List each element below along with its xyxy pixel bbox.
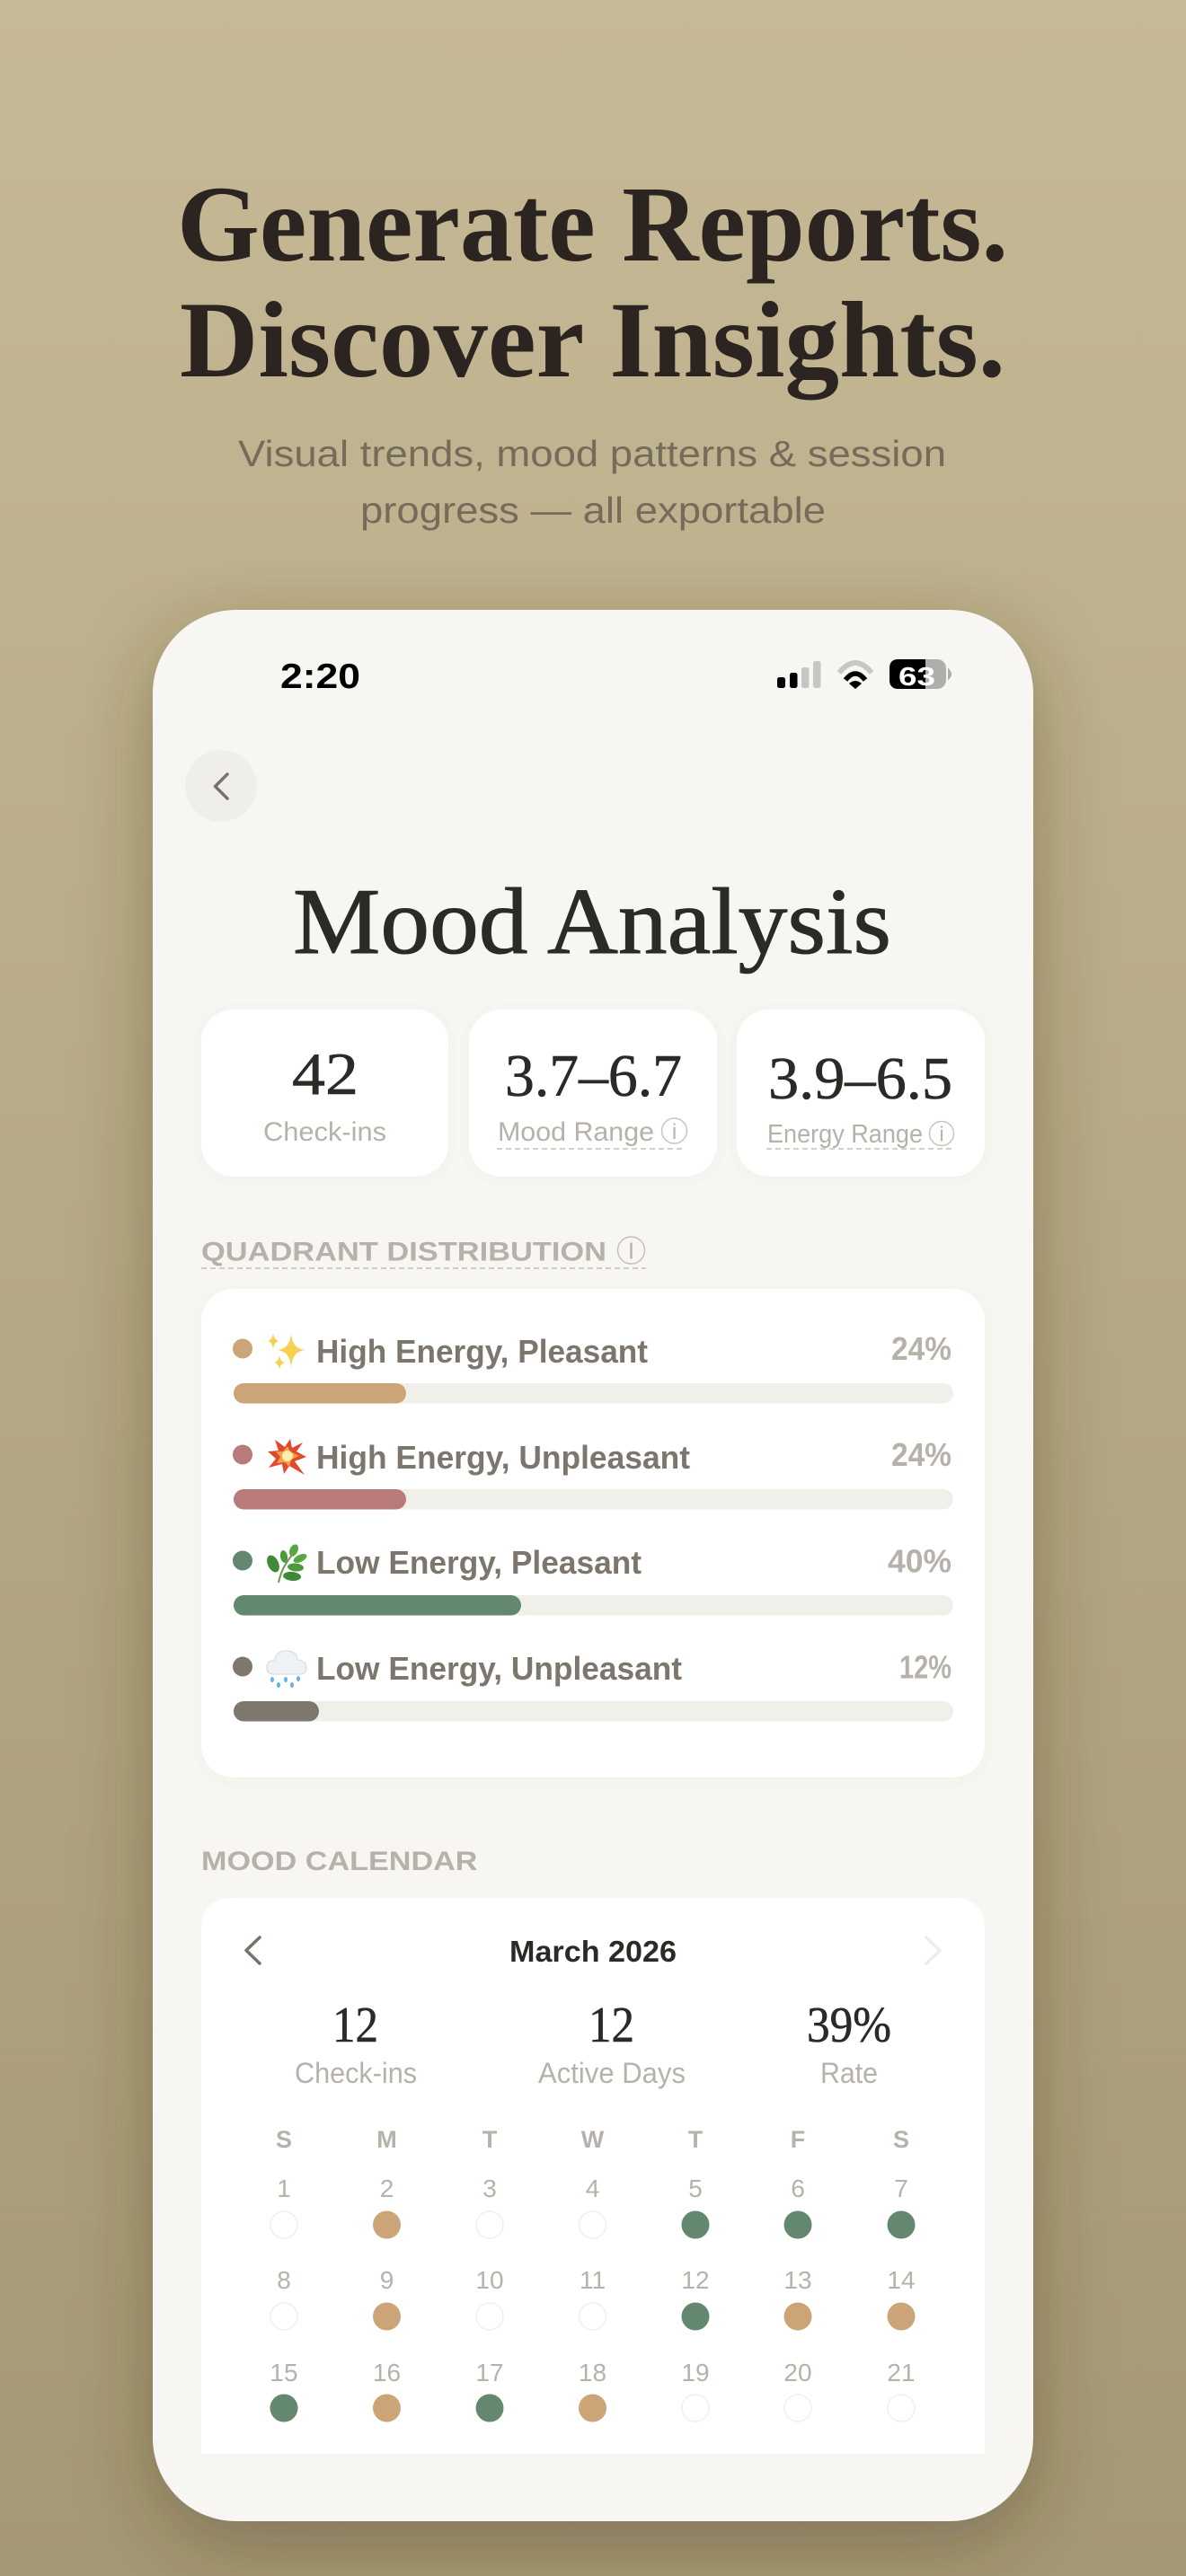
stat card: energy range: i [939,1123,944,1146]
stat card: mood range: i [672,1120,677,1144]
row: high energy, unpleasant [233,1436,953,1509]
calendar stat: check-ins [295,1998,417,2089]
calendar dates: 7 [894,2175,908,2202]
weekday header: M [376,2126,397,2153]
icon: signal [777,661,821,688]
stat card: mood range: 3.7–6.7 [505,1043,682,1109]
icon: rain cloud [267,1651,306,1688]
calendar stat: active days: Active Days [538,2057,686,2089]
calendar dates [270,2175,916,2386]
icon: sparkles [268,1333,305,1370]
month label: March 2026 [509,1935,677,1968]
calendar dates: 2 [380,2175,394,2202]
calendar mood dots [270,2211,915,2422]
calendar stat: active days: 12 [589,1998,634,2053]
phone mockup [153,610,1033,2521]
calendar dates: 18 [579,2359,606,2386]
stat card: check-ins: Check-ins [263,1117,386,1147]
next month arrow [926,1937,940,1963]
calendar dates: 4 [586,2175,599,2202]
weekday header: S [893,2126,909,2153]
subtitle [238,433,946,531]
stat card: energy range [737,1010,985,1177]
calendar stat: rate: 39% [807,1998,891,2053]
calendar dates: 17 [475,2359,504,2386]
icon: collision [268,1439,306,1475]
calendar dates: 6 [791,2175,805,2202]
subtitle: progress — all exportable [360,490,826,531]
stat card: mood range: Mood Range [498,1117,654,1147]
stat card: energy range: 3.9–6.5 [768,1045,952,1112]
row: high energy, unpleasant: 24% [891,1436,951,1473]
weekday header: F [791,2126,805,2153]
subtitle: Visual trends, mood patterns & session [238,433,946,474]
row: low energy, unpleasant: 12% [899,1649,951,1685]
row: high energy, pleasant: High Energy, Pleasant [316,1333,648,1370]
calendar stat: active days [538,1998,686,2089]
calendar dates: 10 [475,2266,504,2294]
calendar stat: rate [807,1998,891,2089]
heading: quadrant distribution: I [628,1238,634,1265]
row: low energy, unpleasant [233,1649,953,1721]
panel: quadrant distribution [201,1289,985,1778]
weekday header: T [688,2126,704,2153]
calendar dates: 20 [783,2359,812,2386]
weekday header: S [276,2126,292,2153]
calendar dates: 16 [373,2359,401,2386]
calendar dates: 21 [887,2359,916,2386]
calendar stat: check-ins: Check-ins [295,2057,417,2089]
calendar dates: 9 [380,2266,394,2294]
calendar dates: 19 [681,2359,710,2386]
calendar dates: 12 [681,2266,710,2294]
calendar stat: rate: Rate [820,2057,878,2089]
phone body [153,610,1033,2521]
calendar dates: 8 [277,2266,291,2294]
row: high energy, pleasant: 24% [891,1330,951,1367]
stat card: energy range: Energy Range [767,1120,923,1149]
stat card: check-ins: 42 [292,1041,358,1107]
weekday header: W [581,2126,605,2153]
icon: herb [264,1543,308,1583]
stat card: check-ins [201,1010,448,1177]
heading: quadrant distribution: QUADRANT DISTRIBUTION [201,1238,606,1266]
status bar [280,657,951,696]
back button [185,750,257,822]
icon: battery [890,659,951,692]
calendar dates: 11 [580,2266,606,2294]
row: low energy, unpleasant: Low Energy, Unpleasant [316,1650,682,1687]
calendar dates: 3 [482,2175,497,2202]
page title: Mood Analysis [293,869,891,974]
headline [177,164,1008,401]
row: low energy, pleasant: 40% [888,1543,951,1579]
row: low energy, pleasant [233,1543,953,1615]
headline: Generate Reports. [177,164,1008,285]
icon: battery: 63 [898,663,935,692]
clock: 2:20 [280,657,360,696]
previous month arrow [246,1937,260,1963]
stat card: mood range [469,1010,717,1177]
calendar dates: 5 [688,2175,703,2202]
calendar dates: 15 [270,2359,298,2386]
calendar dates: 1 [277,2175,291,2202]
heading: mood calendar: MOOD CALENDAR [201,1847,478,1876]
calendar stat: check-ins: 12 [332,1998,378,2053]
row: high energy, unpleasant: High Energy, Unpleasant [316,1439,690,1476]
icon: wifi [839,663,872,689]
calendar dates: 14 [887,2266,916,2294]
weekday header [276,2126,909,2153]
weekday header: T [482,2126,498,2153]
row: low energy, pleasant: Low Energy, Pleasant [316,1544,642,1581]
panel: mood calendar [201,1898,985,2454]
row: high energy, pleasant [233,1330,953,1403]
calendar dates: 13 [783,2266,812,2294]
headline: Discover Insights. [180,280,1005,401]
